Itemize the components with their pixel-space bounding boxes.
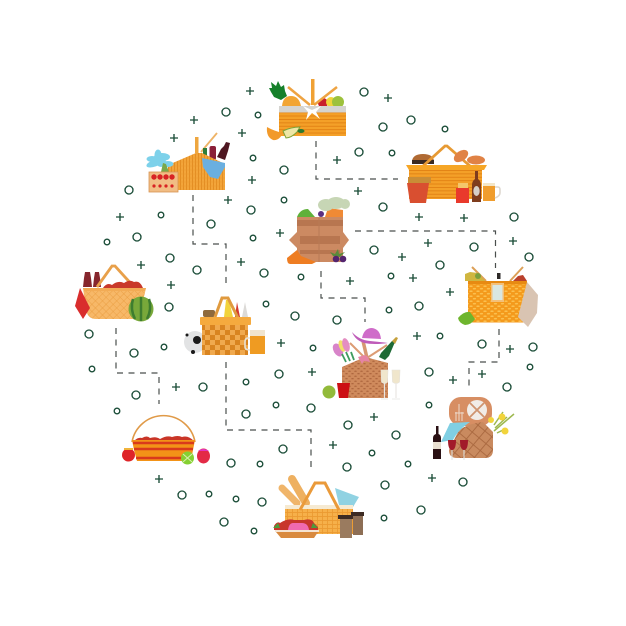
- icon: bottom left fruit basket with arched handle: [122, 416, 210, 464]
- connector: brown bag to right basket: [355, 231, 496, 268]
- icon: top basket with fruit: [267, 79, 346, 140]
- connector: flower basket to football basket: [193, 195, 226, 288]
- icon: right basket with cloth and lime: [458, 267, 538, 327]
- connector: football basket to bottom basket: [226, 362, 311, 471]
- decorative plus markers: [116, 87, 517, 483]
- icon: burger hamper with drinks: [406, 146, 500, 203]
- connector: left basket to fruit basket: [116, 328, 159, 404]
- icon: bottom basket with baguettes, plate and coffee cups: [273, 479, 364, 538]
- icon: left basket with bottles, cloth and watermelon: [75, 266, 154, 322]
- icon: checkered basket with football and mug: [184, 298, 265, 355]
- decorative circle markers: [85, 88, 537, 534]
- icon: brown bag with vegetables: [287, 197, 350, 264]
- icon: brown basket with hat, champagne and flowers: [322, 328, 400, 399]
- icon: gable basket with flowers and wine: [145, 133, 230, 192]
- connector: right basket to wine basket: [469, 329, 499, 389]
- connector: brown bag to hat basket: [321, 271, 365, 322]
- connector: top basket to burger hamper: [316, 141, 398, 179]
- icon: wine basket with plate and daffodils: [433, 397, 514, 460]
